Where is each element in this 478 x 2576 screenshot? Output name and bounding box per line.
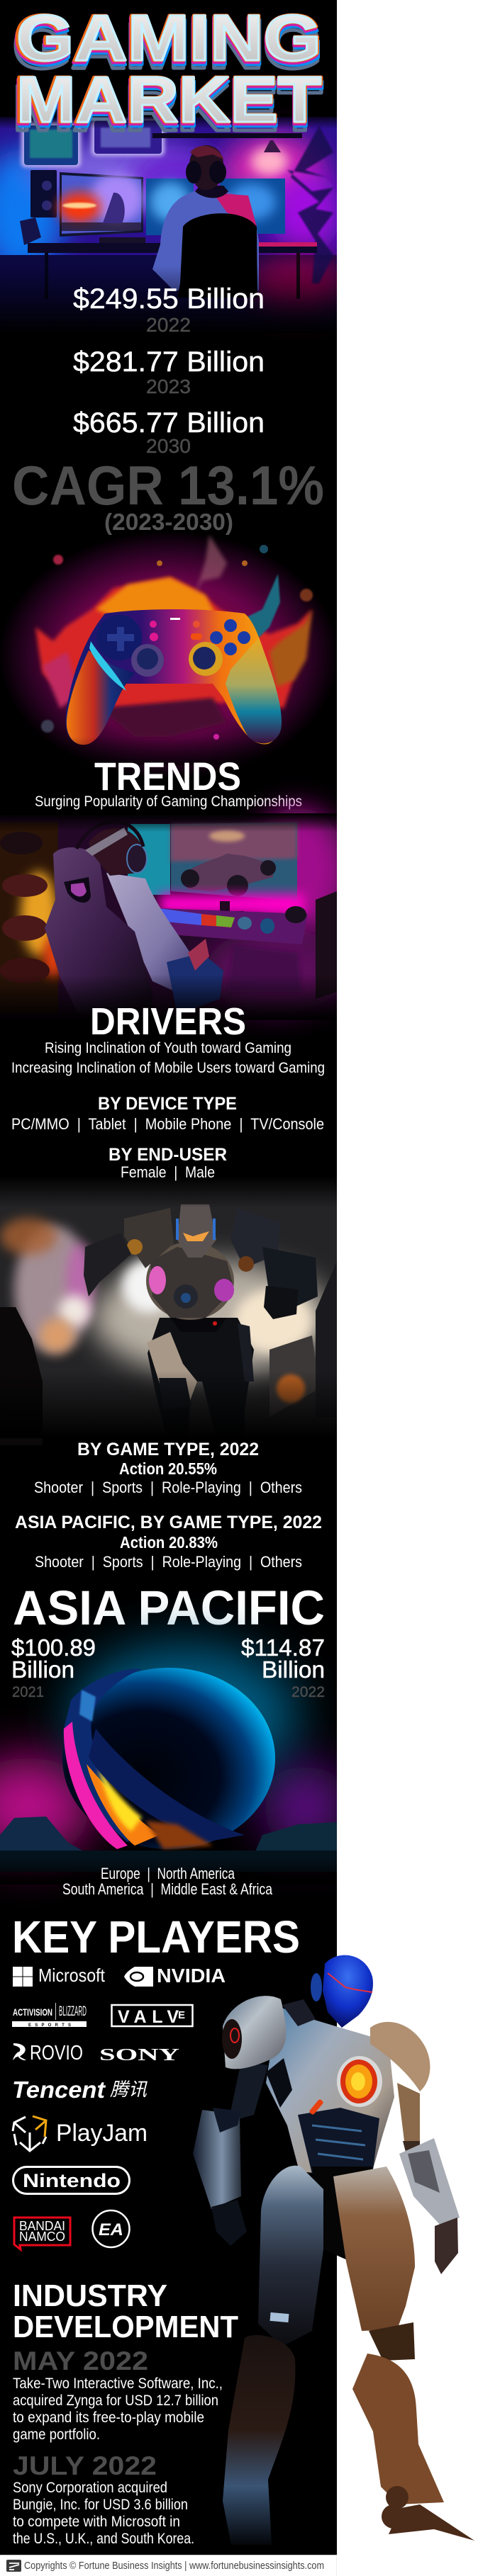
logo: Sony: SONY xyxy=(99,2046,179,2064)
buildings xyxy=(269,1335,319,1417)
trend item: Surging Popularity of Gaming Championships xyxy=(35,793,302,810)
gamer xyxy=(152,190,259,290)
illustration: gamer at racing setup xyxy=(0,808,348,1020)
keyboard xyxy=(159,908,235,927)
logo: Valve xyxy=(112,2005,193,2027)
CAGR headline: CAGR 13.1% xyxy=(12,454,324,516)
black background panel xyxy=(0,0,337,2555)
regions list: Europe | North America xyxy=(101,1865,235,1882)
logo: NVIDIA: NVIDIA xyxy=(157,1965,226,1987)
illustration: running battle robot in city xyxy=(0,1176,337,1445)
fades xyxy=(0,113,337,129)
shelf and lamp xyxy=(152,133,302,138)
Asia Pacific 2021 value: Billion xyxy=(11,1656,74,1683)
right arm xyxy=(397,2083,420,2141)
segment heading: device type: BY DEVICE TYPE xyxy=(98,1094,237,1114)
Asia Pacific 2022 value: 2022 xyxy=(291,1684,325,1700)
helmet xyxy=(311,1955,373,2028)
logo: Tencent: 腾讯 xyxy=(110,2079,148,2100)
torso xyxy=(266,2006,394,2179)
game type share: Action 20.55% xyxy=(119,1459,217,1478)
title: GAMING MARKET: GAMING xyxy=(13,10,322,82)
section heading: industry development: DEVELOPMENT xyxy=(13,2310,238,2344)
end-user list: Female | Male xyxy=(121,1163,215,1181)
hips and thighs xyxy=(312,2167,372,2267)
illustration: glowing planet xyxy=(0,1644,348,1885)
regions list: South America | Middle East & Africa xyxy=(62,1880,273,1898)
fades xyxy=(0,1176,337,1208)
chest core xyxy=(337,2056,382,2107)
development text: Take-Two xyxy=(13,2376,223,2443)
development text: Take-Two: to expand its free-to-play mobile xyxy=(13,2410,204,2426)
Asia Pacific 2022 value xyxy=(241,1634,325,1700)
driver item 2: Increasing Inclination of Mobile Users toward Gaming xyxy=(11,1060,325,1076)
regions list xyxy=(62,1865,273,1898)
logo: Nintendo xyxy=(13,2167,129,2193)
logo: Nintendo: Nintendo xyxy=(23,2170,121,2191)
logo: PlayJam xyxy=(13,2116,148,2151)
copyright line: Copyrights © Fortune Business Insights | www.fortunebusinessinsights.com xyxy=(24,2560,324,2572)
left shin xyxy=(223,2335,295,2545)
section heading: industry development: INDUSTRY xyxy=(13,2278,167,2313)
robot xyxy=(84,1204,318,1413)
logo: PlayJam: PlayJam xyxy=(56,2120,148,2147)
game type list: Shooter | Sports | Role-Playing | Others xyxy=(34,1479,302,1496)
Asia Pacific list: Shooter | Sports | Role-Playing | Others xyxy=(35,1553,302,1571)
2023 year: 2023 xyxy=(146,375,191,397)
speakers xyxy=(30,170,57,218)
logo: Tencent: Tencent xyxy=(12,2077,106,2103)
title: GAMING MARKET: GAMING xyxy=(14,2,322,74)
illustration: game controller with paint splash xyxy=(0,531,339,779)
logo: Bandai Namco: BANDAI xyxy=(19,2219,65,2233)
section heading: trends: TRENDS xyxy=(94,754,241,798)
shelves xyxy=(0,822,58,1013)
Asia Pacific 2022 value: Billion xyxy=(262,1656,325,1683)
Asia Pacific 2021 value: 2021 xyxy=(12,1684,44,1700)
title: GAMING MARKET: MARKET xyxy=(14,64,322,136)
logo: Valve: VALV xyxy=(118,2007,179,2027)
development text: Take-Two: game portfolio. xyxy=(13,2427,100,2443)
fades xyxy=(0,813,337,832)
logo: Bandai Namco xyxy=(14,2218,70,2249)
title: GAMING MARKET: MARKET xyxy=(15,68,323,140)
market size figures xyxy=(73,283,265,457)
logo: NVIDIA xyxy=(124,1965,226,1987)
logo: Tencent xyxy=(12,2077,148,2103)
logo: EA xyxy=(92,2210,129,2247)
2022 value: $249.55 Billion xyxy=(73,283,265,315)
logo: Microsoft xyxy=(13,1965,106,1987)
Asia Pacific 2022 value: $114.87 xyxy=(241,1634,325,1661)
title: GAMING MARKET: GAMING xyxy=(15,6,323,79)
2030 value: $665.77 Billion xyxy=(73,407,265,439)
race car xyxy=(181,854,273,891)
2022 year: 2022 xyxy=(146,314,191,336)
icon: Fortune Business Insights mark xyxy=(6,2560,21,2572)
logo: Rovio: ROVIO xyxy=(30,2042,83,2064)
2023 value: $281.77 Billion xyxy=(73,346,265,378)
title: GAMING MARKET: MARKET xyxy=(13,72,322,145)
development text: Sony: Bungie, Inc. for USD 3.6 billion xyxy=(13,2497,188,2513)
logo: Activision Blizzard Esports: ACTIVISION xyxy=(13,2006,52,2018)
section heading: drivers: DRIVERS xyxy=(90,1000,246,1043)
date: May 2022: MAY 2022 xyxy=(13,2346,148,2376)
monitors xyxy=(128,824,170,895)
section heading: key players: KEY PLAYERS xyxy=(12,1911,300,1962)
plant xyxy=(287,126,333,283)
segment heading: Asia Pacific game type: ASIA PACIFIC, BY GAME TYPE, 2022 xyxy=(15,1513,322,1532)
development text: Take-Two: Take-Two Interactive Software, Inc., xyxy=(13,2376,223,2392)
Asia Pacific share: Action 20.83% xyxy=(120,1533,218,1552)
logo: Microsoft: Microsoft xyxy=(38,1965,106,1986)
logo: Bandai Namco: NAMCO xyxy=(19,2230,65,2244)
abdomen xyxy=(298,2108,379,2175)
development text: Sony: the U.S., U.K., and South Korea. xyxy=(13,2531,194,2547)
2030 year: 2030 xyxy=(146,435,191,457)
date: July 2022: JULY 2022 xyxy=(13,2451,157,2480)
segment heading: game type: BY GAME TYPE, 2022 xyxy=(77,1440,259,1459)
monitors xyxy=(60,172,143,237)
development text: Sony: Sony Corporation acquired xyxy=(13,2480,167,2496)
footer xyxy=(0,2555,337,2576)
Asia Pacific 2021 value xyxy=(11,1634,96,1700)
energy burst xyxy=(14,1226,92,1353)
right shoulder xyxy=(370,2022,430,2091)
posters xyxy=(21,122,81,167)
illustration: silver humanoid robot xyxy=(193,1955,474,2545)
title: GAMING MARKET: MARKET xyxy=(13,66,321,138)
magenta desk glow xyxy=(160,894,305,914)
driver item 1: Rising Inclination of Youth toward Gaming xyxy=(45,1040,291,1056)
section heading: Asia Pacific: ASIA PACIFIC xyxy=(13,1581,325,1635)
CAGR period: (2023-2030) xyxy=(104,509,233,535)
device type list: PC/MMO | Tablet | Mobile Phone | TV/Console xyxy=(11,1115,324,1133)
left arm xyxy=(228,2062,268,2122)
text: BLIZZARD xyxy=(59,2004,87,2019)
Asia Pacific 2021 value: $100.89 xyxy=(11,1634,96,1661)
development text: Sony xyxy=(13,2480,194,2547)
gamer and chair xyxy=(106,873,197,992)
logo: Rovio xyxy=(13,2042,83,2064)
title: GAMING MARKET: GAMING xyxy=(13,4,321,77)
illustration: gamer room with monitors xyxy=(0,113,348,333)
development text: Sony: to compete with Microsoft in xyxy=(13,2514,180,2530)
section heading: industry development xyxy=(13,2278,238,2344)
development text: Take-Two: acquired Zynga for USD 12.7 billion xyxy=(13,2393,218,2409)
logo: Valve: E xyxy=(178,2009,185,2021)
left shoulder xyxy=(222,1996,286,2069)
logo: Activision Blizzard Esports: ESPORTS xyxy=(28,2023,71,2028)
logo: EA: EA xyxy=(99,2220,123,2239)
title: GAMING MARKET: MARKET xyxy=(16,64,321,136)
right shin and foot xyxy=(369,2322,415,2361)
segment heading: end-user: BY END-USER xyxy=(109,1145,227,1165)
title: GAMING MARKET xyxy=(13,2,323,145)
controller body xyxy=(65,609,280,745)
title: GAMING MARKET: GAMING xyxy=(16,2,321,74)
desk xyxy=(28,243,317,253)
logo: Activision Blizzard Esports xyxy=(12,2003,87,2028)
